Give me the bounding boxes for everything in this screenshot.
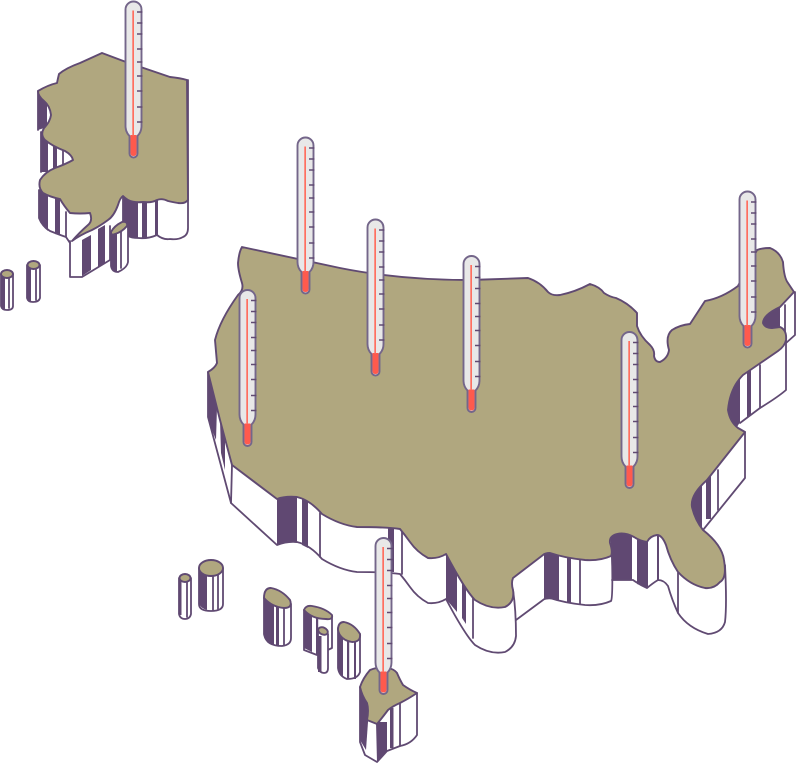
Hawaii island E <box>317 626 329 673</box>
thermometer: New England <box>740 192 756 348</box>
mainland top surface <box>208 247 794 608</box>
Hawaii island F <box>338 622 360 679</box>
thermometer: California <box>240 290 256 446</box>
thermometer: Montana <box>298 138 314 294</box>
Hawaii big island <box>360 667 417 762</box>
thermometer: Hawaii <box>376 538 392 694</box>
Hawaii small island B <box>199 560 223 611</box>
mainland side wall <box>208 292 795 653</box>
Hawaii small island A <box>179 574 191 619</box>
Alaska top surface <box>38 53 188 241</box>
Alaska side wall <box>38 80 188 277</box>
thermometer: Alaska <box>126 2 142 158</box>
thermometer: Kansas <box>464 256 480 412</box>
Alaska <box>1 53 188 310</box>
Alaska island <box>111 222 128 272</box>
Hawaii island C <box>264 588 291 646</box>
Hawaii <box>179 560 417 762</box>
thermometer: Colorado <box>368 220 384 376</box>
Aleutian island east <box>27 261 40 302</box>
thermometer: Georgia <box>622 332 638 488</box>
Aleutian island west <box>1 270 13 310</box>
Hawaii island D <box>304 606 332 655</box>
Contiguous United States <box>208 247 795 653</box>
